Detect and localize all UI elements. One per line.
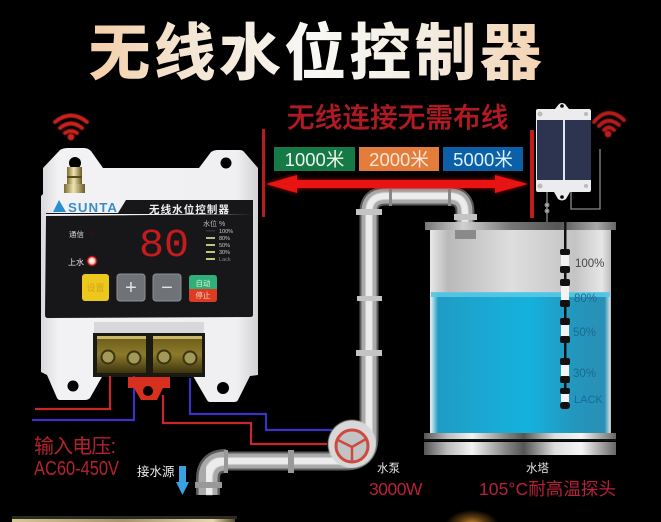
blue pump wire (190, 378, 332, 430)
red current clamp (128, 377, 170, 400)
input voltage label (34, 435, 120, 480)
water tower (424, 222, 616, 455)
range tag 5000m: 5000米 (453, 149, 513, 170)
set button: 设置 (86, 283, 105, 293)
sensor cables (545, 149, 600, 222)
auto stop button (189, 275, 217, 302)
terminal block (93, 333, 205, 377)
tower label: 水塔 (526, 462, 549, 475)
red vertical bar left (262, 129, 265, 217)
solar sensor device (536, 103, 591, 200)
level legend: 50% (219, 243, 230, 249)
auto stop button: 自动 (196, 278, 211, 288)
icon: water source arrow (176, 466, 189, 495)
tank rim (425, 222, 616, 230)
antenna connector (64, 167, 85, 193)
mounting holes (68, 157, 232, 394)
pump label: 3000W (369, 479, 423, 499)
blue input wire (32, 376, 134, 420)
plus button: + (125, 277, 137, 299)
level legend: 水位 % (203, 219, 225, 228)
inlet fitting (455, 230, 476, 239)
tower label (479, 462, 616, 499)
level legend (203, 219, 233, 263)
comm LED (90, 232, 94, 236)
controller device (41, 148, 258, 402)
level labels: 80% (574, 293, 597, 305)
range tag 1000m: 1000米 (285, 149, 344, 170)
level labels: 30% (573, 368, 596, 380)
water LED (86, 255, 98, 267)
icon: wifi right (594, 113, 624, 137)
water source label: 接水源 (137, 464, 175, 479)
range tag 2000m: 2000米 (369, 149, 429, 170)
wireless range heading: 无线连接无需布线 (287, 102, 509, 133)
wires (32, 376, 332, 444)
title: 无线水位控制器 (89, 3, 545, 92)
display panel (45, 200, 253, 318)
input voltage label: 输入电压: (34, 435, 116, 458)
double arrow (266, 175, 528, 193)
red input wire (35, 376, 110, 409)
level probe (560, 222, 570, 409)
device name: 无线水位控制器 (149, 203, 230, 216)
pump label: 水泵 (377, 462, 400, 475)
level legend: 30% (219, 250, 230, 256)
solar panel (537, 120, 591, 180)
water label: 上水 (68, 257, 84, 267)
level labels: 100% (575, 258, 604, 270)
controller body (41, 148, 258, 402)
tank base (424, 433, 616, 455)
tower label: 105°C耐高温探头 (479, 479, 616, 499)
level legend: 100% (219, 229, 233, 235)
red vertical bar right (530, 130, 534, 218)
minus button (153, 274, 181, 301)
pump (328, 420, 376, 468)
level labels: LACK (574, 394, 603, 406)
range tag 1000m (274, 147, 355, 171)
bottom glow (446, 510, 498, 522)
tank body (430, 230, 611, 434)
level labels: 50% (573, 327, 596, 339)
range tag 5000m (443, 147, 523, 171)
minus button: − (161, 277, 173, 299)
input voltage label: AC60-450V (34, 458, 120, 480)
header band (46, 200, 253, 214)
auto stop button: 停止 (196, 290, 211, 300)
level labels (573, 258, 604, 406)
water (431, 293, 610, 433)
level legend: 80% (219, 236, 230, 242)
comm label: 通信 (69, 229, 84, 239)
red digits: 80 (139, 224, 189, 269)
level legend: Lack (219, 257, 231, 263)
red pump wire (163, 395, 327, 444)
logo: SUNTA (68, 200, 118, 215)
pump label (369, 462, 423, 499)
terminal label strip (94, 322, 204, 333)
icon: wifi left (55, 116, 87, 140)
set button (82, 274, 109, 301)
range tag 2000m (359, 147, 439, 171)
pipe collars (195, 186, 477, 488)
plus button (117, 274, 145, 301)
bottom stripe (12, 516, 237, 522)
water pipe (195, 186, 477, 495)
